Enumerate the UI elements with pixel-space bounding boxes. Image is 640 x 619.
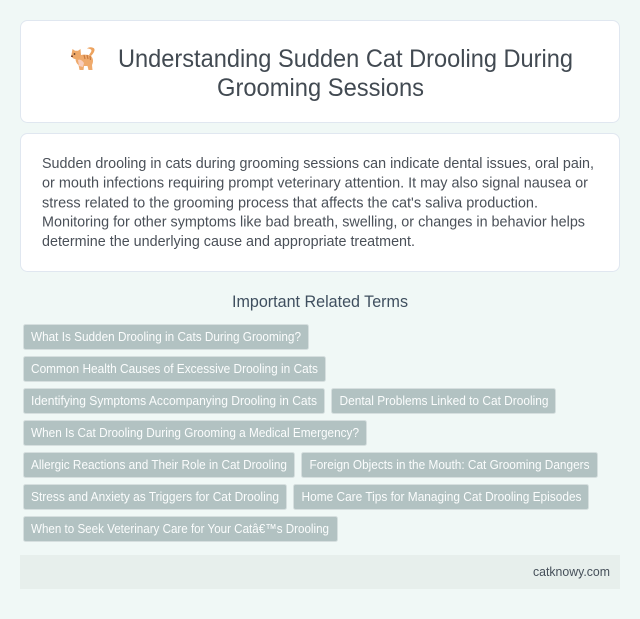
footer: catknowy.com [533,564,610,579]
tag [24,388,324,414]
title text: Grooming Sessions [217,74,424,102]
title text: Understanding Sudden Cat Drooling During [118,45,573,73]
summary paragraph: determine the underlying cause and appropriate treatment. [42,233,415,250]
tag: Common Health Causes of Excessive Drooling in Cats [31,361,318,376]
tag [302,452,598,478]
tag: Allergic Reactions and Their Role in Cat Drooling [31,457,287,472]
tag [24,452,294,478]
icon: cat [71,47,95,70]
tag: Identifying Symptoms Accompanying Drooling in Cats [31,393,317,408]
tag: What Is Sudden Drooling in Cats During Grooming? [31,329,301,344]
tag: When Is Cat Drooling During Grooming a Medical Emergency? [31,425,359,440]
tag list: related terms [24,324,598,542]
tag: Dental Problems Linked to Cat Drooling [340,393,548,408]
tag: Home Care Tips for Managing Cat Drooling Episodes [302,489,582,504]
panel: title card [20,20,620,122]
tag [24,516,338,542]
tag: Foreign Objects in the Mouth: Cat Grooming Dangers [310,457,590,472]
heading: related terms: Important Related Terms [232,292,408,311]
panel: summary card [20,134,620,272]
tag [24,356,326,382]
tag [294,484,588,510]
tag: When to Seek Veterinary Care for Your Catâ€™s Drooling [31,521,329,536]
summary paragraph: Sudden drooling in cats during grooming sessions can indicate dental issues, oral pain, [42,155,594,172]
summary paragraph [42,155,594,250]
tag [332,388,556,414]
summary paragraph: stress related to the grooming process that affects the cat's saliva production. [42,194,538,212]
tag [24,324,308,350]
summary paragraph: Monitoring for other symptoms like bad breath, swelling, or changes in behavior helps [42,214,585,230]
footer [20,555,620,589]
title text [118,45,573,102]
tag: Stress and Anxiety as Triggers for Cat Drooling [31,489,279,504]
tag [24,484,286,510]
tag [24,420,366,446]
summary paragraph: or mouth infections requiring prompt veterinary attention. It may also signal nausea or [42,174,588,192]
